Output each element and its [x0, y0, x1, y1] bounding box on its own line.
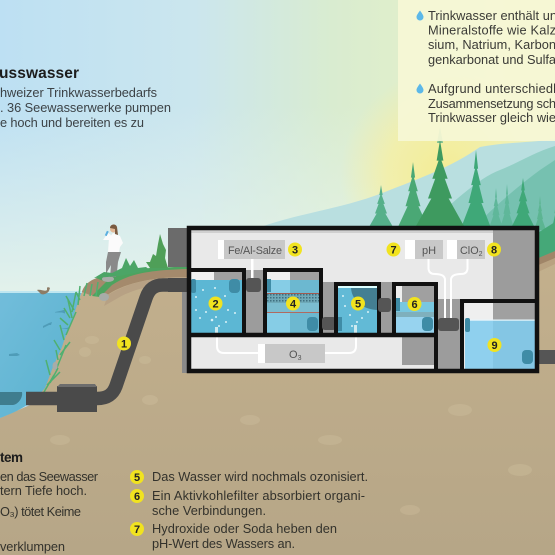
- tank 9: [462, 301, 537, 372]
- number badges on diagram: 8: [491, 244, 497, 256]
- legend item 7: 7: [134, 524, 140, 536]
- number badges on diagram: [208, 242, 502, 352]
- intake chamber: [57, 384, 97, 412]
- number badges on diagram: 9: [491, 340, 498, 352]
- label: O3: O: [289, 349, 298, 361]
- icon: water drop: [416, 84, 424, 94]
- pipe between 5 and 6: [378, 298, 391, 312]
- pipe between 2 and 4: [246, 278, 261, 292]
- number 1: 1: [121, 338, 127, 350]
- number badges on diagram: 3: [292, 244, 298, 256]
- label: ClO2: [447, 240, 485, 259]
- legend item 6: [130, 488, 365, 518]
- legend item 6: Ein Aktivkohlefilter absorbiert organi-: [152, 488, 365, 503]
- text: mineral content: sium, Natrium, Karbon: [428, 37, 555, 52]
- legend item 7: [130, 521, 337, 551]
- reeds: [44, 282, 98, 392]
- grey interior zones: [493, 230, 536, 302]
- legend item 6: sche Verbindungen.: [152, 503, 266, 518]
- number badges on diagram: 5: [355, 298, 361, 310]
- legend item 7: pH-Wert des Wassers an.: [152, 536, 295, 551]
- dosing lines: [428, 259, 468, 318]
- outlet pipe: [539, 350, 555, 364]
- pipe between 4 and 5: [322, 317, 336, 330]
- number badges on diagram: 2: [212, 298, 219, 310]
- bank soil layers: [82, 266, 187, 306]
- label: pH: [405, 240, 443, 259]
- inlet pipe with number 1: [0, 285, 190, 412]
- text: composition: Trinkwasser gleich wie: [428, 110, 555, 125]
- forest: [369, 127, 555, 255]
- legend item 5: Das Wasser wird nochmals ozonisiert.: [152, 469, 368, 484]
- label: Fe/Al-Salze: [218, 240, 285, 259]
- label: O3: [258, 344, 325, 363]
- sky background: [0, 0, 555, 300]
- label: ClO2: 2: [479, 251, 483, 258]
- tank 5: [336, 284, 379, 335]
- number badges on diagram: 6: [411, 299, 418, 311]
- left wall: [168, 228, 187, 267]
- text: composition: Aufgrund unterschiedl: [428, 81, 555, 96]
- info panel: top right: [398, 0, 555, 141]
- bushes: [94, 234, 168, 278]
- legend left column: en das Seewasser: [0, 469, 99, 484]
- number badges on diagram: 7: [390, 244, 397, 256]
- heading: system: tem: [0, 450, 23, 465]
- intro text: hweizer Trinkwasserbedarfs: [0, 85, 157, 100]
- legend item 7: Hydroxide oder Soda heben den: [152, 521, 337, 536]
- legend left column: O₃) tötet Keime: [0, 504, 81, 519]
- interior: [189, 228, 538, 371]
- ground right of building: [536, 222, 555, 273]
- legend left column: tern Tiefe hoch.: [0, 483, 87, 498]
- lake: [0, 291, 82, 418]
- building: [168, 228, 555, 373]
- legend item 5: 5: [134, 472, 140, 484]
- feed line Fe/Al: [251, 259, 254, 278]
- intake head in lake: [0, 392, 22, 405]
- mountains: [248, 139, 555, 260]
- tank 4: [265, 270, 321, 335]
- ozone lines: [217, 337, 356, 353]
- legend item 6: 6: [134, 491, 140, 503]
- label: ClO2: ClO: [460, 245, 479, 257]
- label: pH: pH: [422, 245, 436, 257]
- ground texture: [50, 336, 532, 515]
- floor and outer frame: [189, 228, 537, 371]
- label: Fe/Al-Salze: Fe/Al-Salze: [228, 245, 282, 257]
- text: composition: Zusammensetzung sch: [428, 96, 555, 111]
- text: mineral content: Mineralstoffe wie Kalz: [428, 22, 555, 38]
- number badges on diagram: 4: [290, 298, 297, 310]
- icon: water drop: [416, 10, 424, 20]
- number 1: [117, 336, 131, 350]
- intro text: . 36 Seewasserwerke pumpen: [0, 100, 171, 115]
- pipe between 6 and 9: [438, 318, 459, 331]
- stones: [52, 276, 114, 370]
- text: mineral content: Trinkwasser enthält un: [428, 8, 555, 23]
- label: O3: 3: [298, 355, 302, 362]
- tank 6: [394, 284, 436, 372]
- heading: Flusswasser: usswasser: [0, 65, 79, 82]
- legend right column: [130, 469, 368, 551]
- ground: [0, 252, 555, 555]
- person drinking: [103, 224, 123, 277]
- legend left column: verklumpen: [0, 539, 65, 554]
- tank 2: [189, 270, 244, 335]
- icon: duck: [37, 287, 50, 294]
- intro text: e hoch und bereiten es zu: [0, 115, 144, 130]
- text: mineral content: genkarbonat und Sulfa: [428, 52, 555, 67]
- fish: [9, 310, 69, 356]
